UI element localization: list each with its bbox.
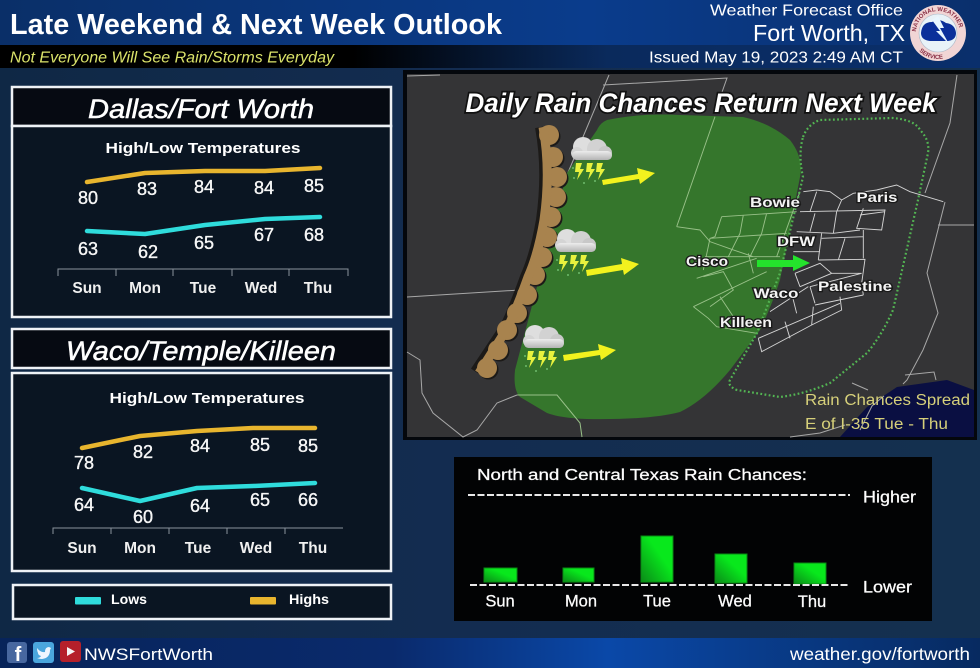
chart title: North and Central Texas Rain Chances: [477,467,807,484]
bar: Wed [715,554,747,583]
arrow: north [602,168,655,185]
line: lows [87,217,320,234]
office information [649,2,905,66]
river on rain area [517,395,582,437]
line: highs [82,428,315,448]
bar: Tue [641,536,673,582]
panel heading [12,329,391,368]
city labels: Bowie [750,194,800,210]
day labels [72,280,332,297]
office information: Fort Worth, TX [753,20,905,46]
day labels: Wed [245,280,277,297]
state boundaries [407,75,974,437]
high values: 80 [78,188,98,208]
low values [78,225,324,262]
day labels: Tue [190,280,217,297]
icon: YouTube [60,641,81,662]
panel: Waco/Temple/Killeen [12,329,391,571]
scale labels: Higher [863,488,917,506]
legend [13,585,391,619]
day labels: Wed [240,540,272,557]
day labels: Thu [304,280,332,297]
icon: storm cloud north [571,137,612,184]
icon: Facebook: f [15,644,22,666]
panel: Dallas/Fort Worth [12,87,391,317]
city labels: Killeen [720,314,772,330]
day labels: Sun [67,540,97,557]
day labels: Tue [185,540,212,557]
day labels: Mon [124,540,156,557]
line: lows [82,483,315,501]
legend: Highs [289,591,329,607]
high values: 85 [298,436,318,456]
city labels: Cisco [686,253,728,269]
day labels: Sun [72,280,102,297]
panel: rain map [403,70,977,440]
header band [0,0,980,68]
icon: storm cloud south [523,325,564,372]
panel heading [12,87,391,126]
low values: 65 [250,490,270,510]
icon: Facebook [7,642,27,666]
high values: 85 [304,176,324,196]
city labels [686,189,898,330]
high values: 83 [137,179,157,199]
chart box: temperatures [12,373,391,571]
high values: 84 [190,436,210,456]
bar: Sun [484,568,517,582]
low values: 66 [298,490,318,510]
icon: NWS logo: NATIONAL WEATHER [912,6,963,32]
map note [805,392,970,433]
legend: Lows [111,591,147,607]
gulf water [840,380,974,437]
line: highs [87,168,320,182]
low values: 67 [254,225,274,245]
extended rain area outline [729,118,928,397]
day labels: Thu [798,593,826,611]
high values [78,176,324,208]
city labels: DFW [777,233,816,249]
title: Late Weekend & Next Week Outlook [10,9,503,41]
icon: Twitter [33,642,54,663]
icon: NWS logo [910,5,966,61]
bar: Thu [794,563,826,584]
city labels: Waco [754,285,798,301]
panel heading: Dallas/Fort Worth [88,94,314,124]
day labels: Tue [643,592,671,610]
low values: 62 [138,242,158,262]
high values: 82 [133,442,153,462]
scale labels [863,488,917,596]
high values: 78 [74,453,94,473]
website: weather.gov/fortworth [789,644,970,664]
high values [74,435,318,473]
high values: 85 [250,435,270,455]
low values: 65 [194,233,214,253]
panel heading: Waco/Temple/Killeen [66,336,336,366]
social handle: NWSFortWorth [84,645,213,664]
map title: Daily Rain Chances Return Next Week [466,88,938,118]
bar: Mon [563,568,594,582]
arrow: central [586,258,639,276]
day labels [67,540,327,557]
day labels: Mon [129,280,161,297]
map note: Rain Chances Spread [805,392,970,409]
map note: E of I-35 Tue - Thu [805,416,948,433]
day labels: Wed [718,592,752,610]
day labels: Sun [485,592,515,610]
chart box: temperatures [12,126,391,317]
scale labels: Lower [863,578,913,596]
city labels: Paris [856,189,898,205]
low values: 68 [304,225,324,245]
office information: Issued May 19, 2023 2:49 AM CT [649,50,904,66]
office information: Weather Forecast Office [710,2,903,20]
dryline front [476,125,568,380]
low values: 64 [74,495,94,515]
day labels: Thu [299,540,327,557]
chart box: temperatures: High/Low Temperatures [106,140,300,157]
low values: 60 [133,507,153,527]
rain area [515,115,801,419]
high values: 84 [194,177,214,197]
footer band [0,638,980,668]
low values: 64 [190,496,210,516]
low values [74,490,318,527]
subtitle: Not Everyone Will See Rain/Storms Everyday [10,50,335,66]
icon: NWS logo: SERVICE [920,48,943,59]
arrow: green eastward [757,255,810,271]
low values: 63 [78,239,98,259]
day labels: Mon [565,592,597,610]
county outlines [677,117,943,352]
arrow: south [563,344,616,361]
city labels: Palestine [818,278,892,294]
panel: rain chances chart [454,457,932,621]
icon: storm cloud central [555,229,596,276]
day labels [485,592,826,611]
chart box: temperatures: High/Low Temperatures [110,390,304,407]
high values: 84 [254,178,274,198]
